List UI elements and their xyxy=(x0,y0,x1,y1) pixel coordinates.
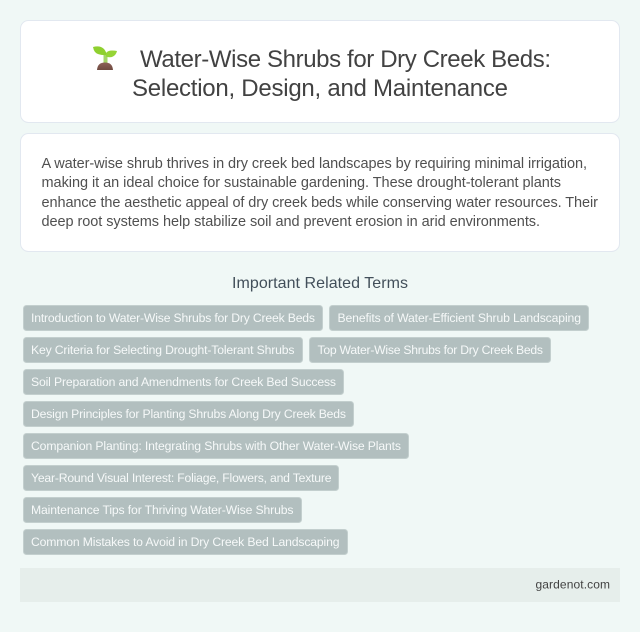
tag: common mistakes xyxy=(24,530,348,554)
tag: maintenance tips xyxy=(24,498,302,522)
heading: important related terms: Important Related Terms xyxy=(232,275,408,292)
icon: seedling xyxy=(93,46,117,70)
tag: top shrubs xyxy=(310,338,550,362)
panel: title card xyxy=(20,20,620,122)
tag: key criteria xyxy=(24,338,302,362)
tag: introduction: Introduction to Water-Wise Shrubs for Dry Creek Beds xyxy=(31,311,315,325)
tag: maintenance tips: Maintenance Tips for Thriving Water-Wise Shrubs xyxy=(31,503,294,517)
panel: related terms xyxy=(24,306,588,554)
tag: design principles xyxy=(24,402,354,426)
tag: introduction xyxy=(24,306,322,330)
tag: year-round interest: Year-Round Visual Interest: Foliage, Flowers, and Texture xyxy=(31,471,332,485)
text block: description: deep root systems help stabilize soil and prevent erosion in arid environments. xyxy=(42,214,540,230)
footer xyxy=(20,568,620,602)
tag: top shrubs: Top Water-Wise Shrubs for Dry Creek Beds xyxy=(318,343,543,357)
tag: design principles: Design Principles for Planting Shrubs Along Dry Creek Beds xyxy=(31,407,346,421)
text block: description: enhance the aesthetic appeal of dry creek beds while conserving water resources. Their xyxy=(42,195,598,211)
text block: description: A water-wise shrub thrives in dry creek bed landscapes by requiring minimal irrigation, xyxy=(42,156,587,172)
title xyxy=(132,46,551,102)
tag: year-round interest xyxy=(24,466,338,490)
title: Water-Wise Shrubs for Dry Creek Beds: xyxy=(140,46,551,73)
panel: description xyxy=(20,134,620,252)
tag: soil preparation xyxy=(24,370,344,394)
text block: description xyxy=(42,156,598,230)
tag: benefits xyxy=(330,306,588,330)
text block: description: making it an ideal choice for sustainable gardening. These drought-tolerant plants xyxy=(42,175,561,191)
title: Selection, Design, and Maintenance xyxy=(132,75,508,102)
tag: companion planting xyxy=(24,434,408,458)
tag: soil preparation: Soil Preparation and Amendments for Creek Bed Success xyxy=(31,375,336,389)
tag: benefits: Benefits of Water-Efficient Shrub Landscaping xyxy=(338,311,581,325)
tag: companion planting: Companion Planting: Integrating Shrubs with Other Water-Wise Plants xyxy=(31,439,401,453)
tag: key criteria: Key Criteria for Selecting Drought-Tolerant Shrubs xyxy=(31,343,294,357)
tag: common mistakes: Common Mistakes to Avoid in Dry Creek Bed Landscaping xyxy=(31,535,340,549)
footer: gardenot.com xyxy=(536,578,610,592)
